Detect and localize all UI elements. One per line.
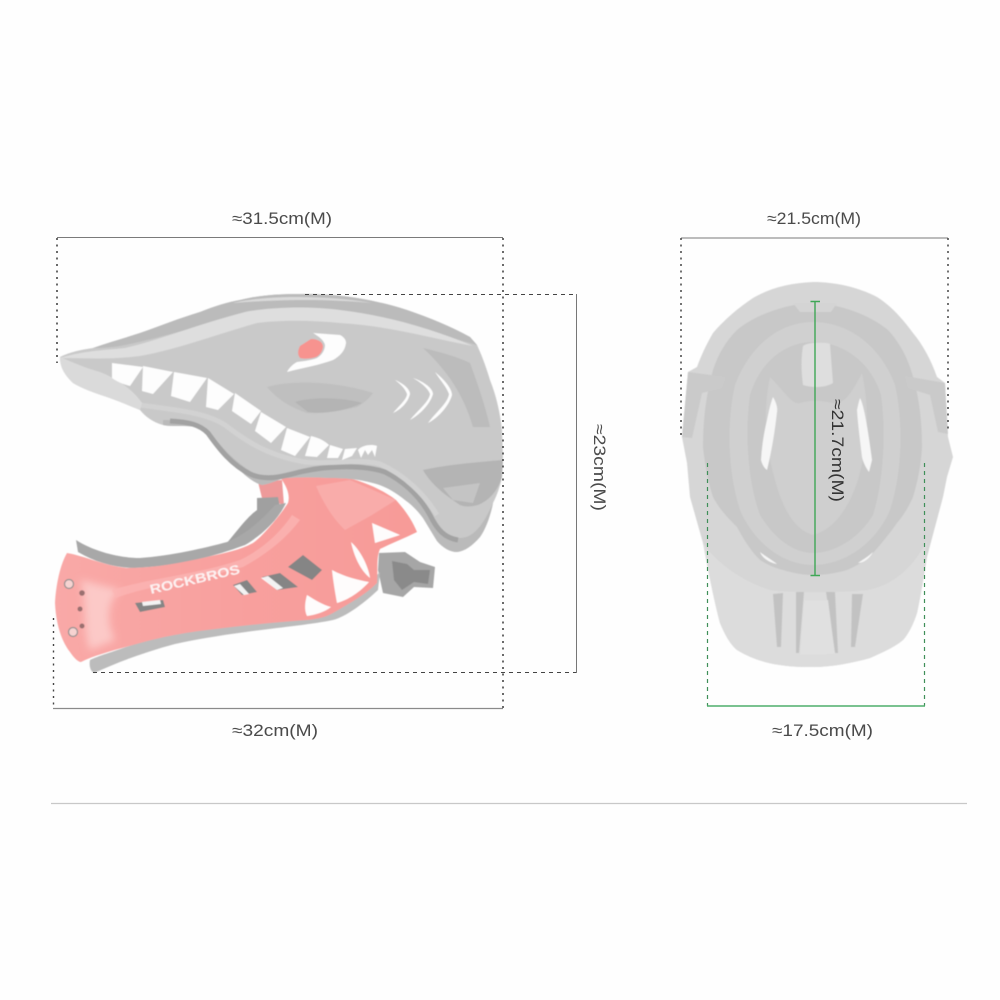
visor ribs xyxy=(773,592,863,653)
chin screws xyxy=(64,580,78,636)
shark eye xyxy=(287,333,346,372)
chin teeth xyxy=(305,523,400,616)
side recess xyxy=(267,383,373,413)
right dotted guide xyxy=(947,238,949,432)
rear vent mesh xyxy=(443,483,480,503)
helmet shell xyxy=(60,294,503,552)
label: inside depth: ≈21.7cm(M) xyxy=(828,399,846,502)
green bottom line xyxy=(707,705,925,707)
bottom width line xyxy=(53,708,503,710)
right strap xyxy=(905,376,948,434)
lower height guide xyxy=(93,672,577,674)
visor underside xyxy=(60,357,142,410)
left dotted guide xyxy=(680,238,682,438)
chin left pale glow xyxy=(80,580,120,650)
light rim stripe xyxy=(140,405,437,515)
chin upper padding xyxy=(76,503,286,568)
label: top width: ≈31.5cm(M) xyxy=(232,210,332,228)
divider xyxy=(51,802,967,804)
strap behind chin xyxy=(258,480,284,505)
mount bracket xyxy=(378,552,435,597)
top width line xyxy=(681,237,948,239)
rear vent xyxy=(423,460,503,506)
inner cheek pad xyxy=(226,497,280,544)
side view helmet xyxy=(55,294,503,673)
vent highlights xyxy=(142,576,283,606)
left dotted guide xyxy=(56,238,58,363)
visor foam xyxy=(703,540,927,667)
green depth line xyxy=(810,302,820,576)
bracket detail xyxy=(392,561,430,590)
rear dark panel xyxy=(423,348,490,427)
top stub xyxy=(793,303,837,312)
top dark strip xyxy=(93,294,477,348)
eye pupil xyxy=(298,339,323,359)
top vent opening xyxy=(802,343,833,387)
central pad xyxy=(766,373,867,535)
brow slot right xyxy=(858,552,873,563)
left strap xyxy=(682,372,726,438)
right dotted guide xyxy=(502,238,504,709)
upper height guide xyxy=(305,294,577,296)
lower rim band xyxy=(163,420,493,552)
dark rim stripe xyxy=(170,421,458,540)
top width line xyxy=(57,236,503,238)
light visor band xyxy=(60,308,473,358)
bottom left dotted guide xyxy=(52,618,54,709)
gill marks xyxy=(393,372,452,423)
liner ring xyxy=(730,322,900,565)
outer shell and visor xyxy=(682,282,953,667)
label: bottom width: ≈32cm(M) xyxy=(232,722,318,740)
chin bar body xyxy=(55,475,417,662)
liner inner well xyxy=(747,342,884,553)
right vent slot xyxy=(857,398,872,472)
brow slot left xyxy=(760,552,777,564)
green left guide xyxy=(706,463,708,706)
brand name: ROCKBROS xyxy=(148,562,242,597)
chin holes xyxy=(78,590,85,628)
chin upper sheen xyxy=(316,480,396,530)
inside view helmet xyxy=(682,282,953,667)
top thin light stripe xyxy=(233,297,372,303)
label: inside top width: ≈21.5cm(M) xyxy=(767,210,861,228)
label: inside bottom width: ≈17.5cm(M) xyxy=(772,722,873,740)
side recess inner xyxy=(295,398,362,413)
chin vents xyxy=(135,555,322,612)
height line xyxy=(576,294,578,673)
side view dimension lines xyxy=(53,238,577,709)
label: height: ≈23cm(M) xyxy=(590,424,608,511)
teeth xyxy=(112,363,377,460)
chin sheen line xyxy=(112,515,300,598)
inside view dimension lines xyxy=(681,238,948,706)
green right guide xyxy=(924,463,926,706)
left vent slot xyxy=(761,397,777,470)
inner liner xyxy=(703,303,922,575)
chin lower trim xyxy=(90,572,380,673)
visor centre panel xyxy=(800,600,835,655)
